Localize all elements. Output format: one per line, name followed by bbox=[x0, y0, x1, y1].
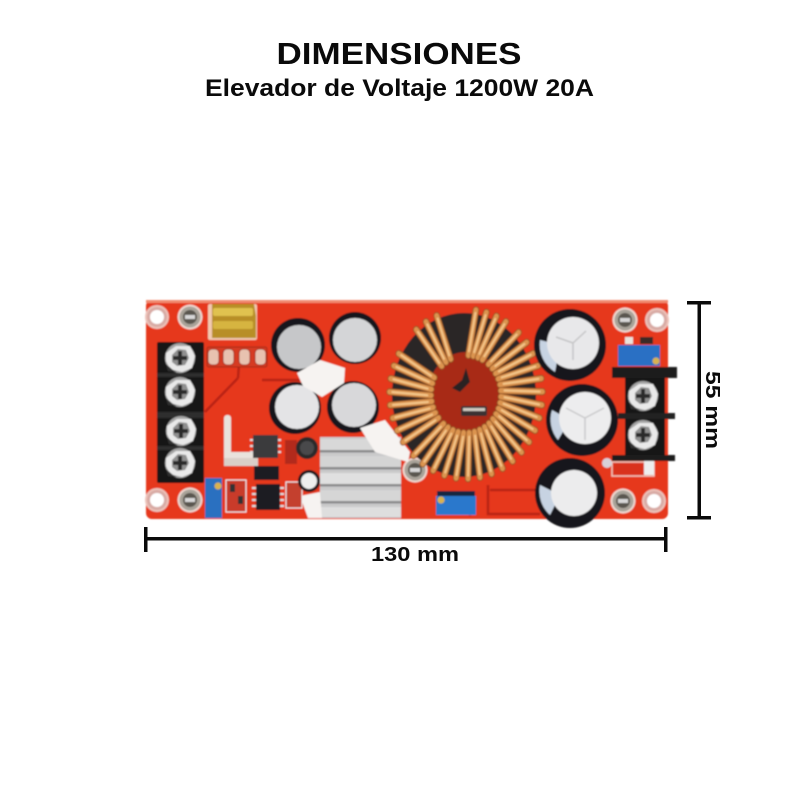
capacitors left group bbox=[269, 312, 381, 434]
board bbox=[146, 300, 668, 519]
blue trimmer left bbox=[205, 478, 222, 518]
circuit board photo bbox=[145, 300, 677, 528]
left screw terminal bbox=[157, 342, 204, 483]
mounting holes bbox=[145, 305, 669, 513]
height label: 55 mm bbox=[701, 371, 723, 449]
height dimension line bbox=[687, 301, 711, 520]
toroid inductor bbox=[390, 310, 542, 479]
title: DIMENSIONES bbox=[276, 36, 522, 71]
capacitors right group bbox=[534, 309, 618, 528]
width dimension line bbox=[144, 527, 668, 552]
blue trimmer center bbox=[436, 491, 476, 515]
resistor and small parts bbox=[602, 458, 654, 476]
solder pads bbox=[207, 347, 267, 367]
fuse bbox=[208, 304, 257, 340]
white silicone bbox=[297, 360, 410, 518]
right screw terminal bbox=[612, 367, 677, 461]
heat sink bbox=[320, 437, 401, 518]
blue trimmer right bbox=[618, 337, 660, 366]
subtitle: Elevador de Voltaje 1200W 20A bbox=[205, 75, 594, 102]
mounting screws bbox=[178, 304, 638, 514]
width label: 130 mm bbox=[371, 544, 459, 566]
control electronics bbox=[226, 435, 320, 512]
